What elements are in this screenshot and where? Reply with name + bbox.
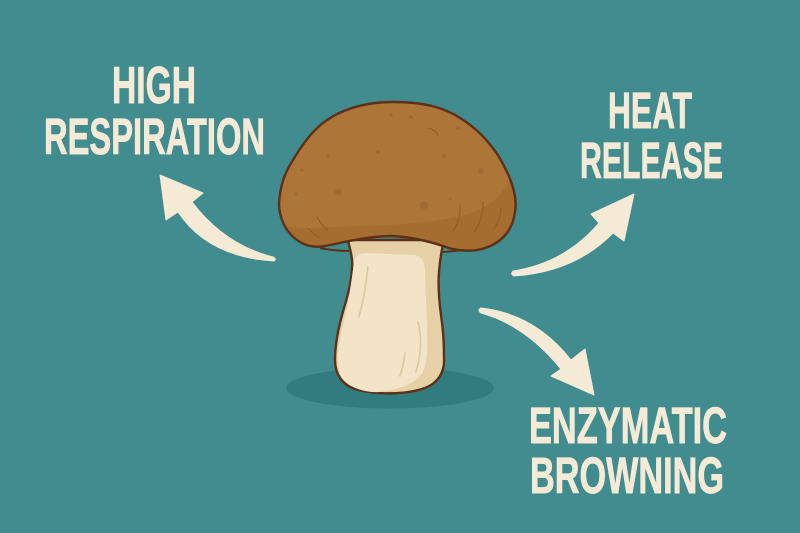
arrow: to heat release xyxy=(512,194,634,276)
arrow: to high respiration xyxy=(160,175,275,261)
label: high respiration: RESPIRATION xyxy=(44,108,265,165)
cap speckles xyxy=(294,113,484,209)
veil lines under cap xyxy=(320,247,474,252)
label: high respiration xyxy=(44,57,265,165)
cap shaded rim xyxy=(285,180,516,251)
label: heat release xyxy=(580,82,723,189)
label: heat release: HEAT xyxy=(608,82,692,139)
arrow: to enzymatic browning xyxy=(479,308,594,395)
cap xyxy=(279,102,516,251)
label: enzymatic browning xyxy=(529,397,727,504)
ground shadow xyxy=(286,368,494,408)
stem xyxy=(335,240,444,393)
label: high respiration: HIGH xyxy=(112,57,196,115)
cap gill marks xyxy=(309,128,501,238)
mushroom xyxy=(279,102,516,393)
cap outline xyxy=(279,102,516,251)
stem fibres xyxy=(359,267,421,376)
stem highlight xyxy=(338,253,427,392)
